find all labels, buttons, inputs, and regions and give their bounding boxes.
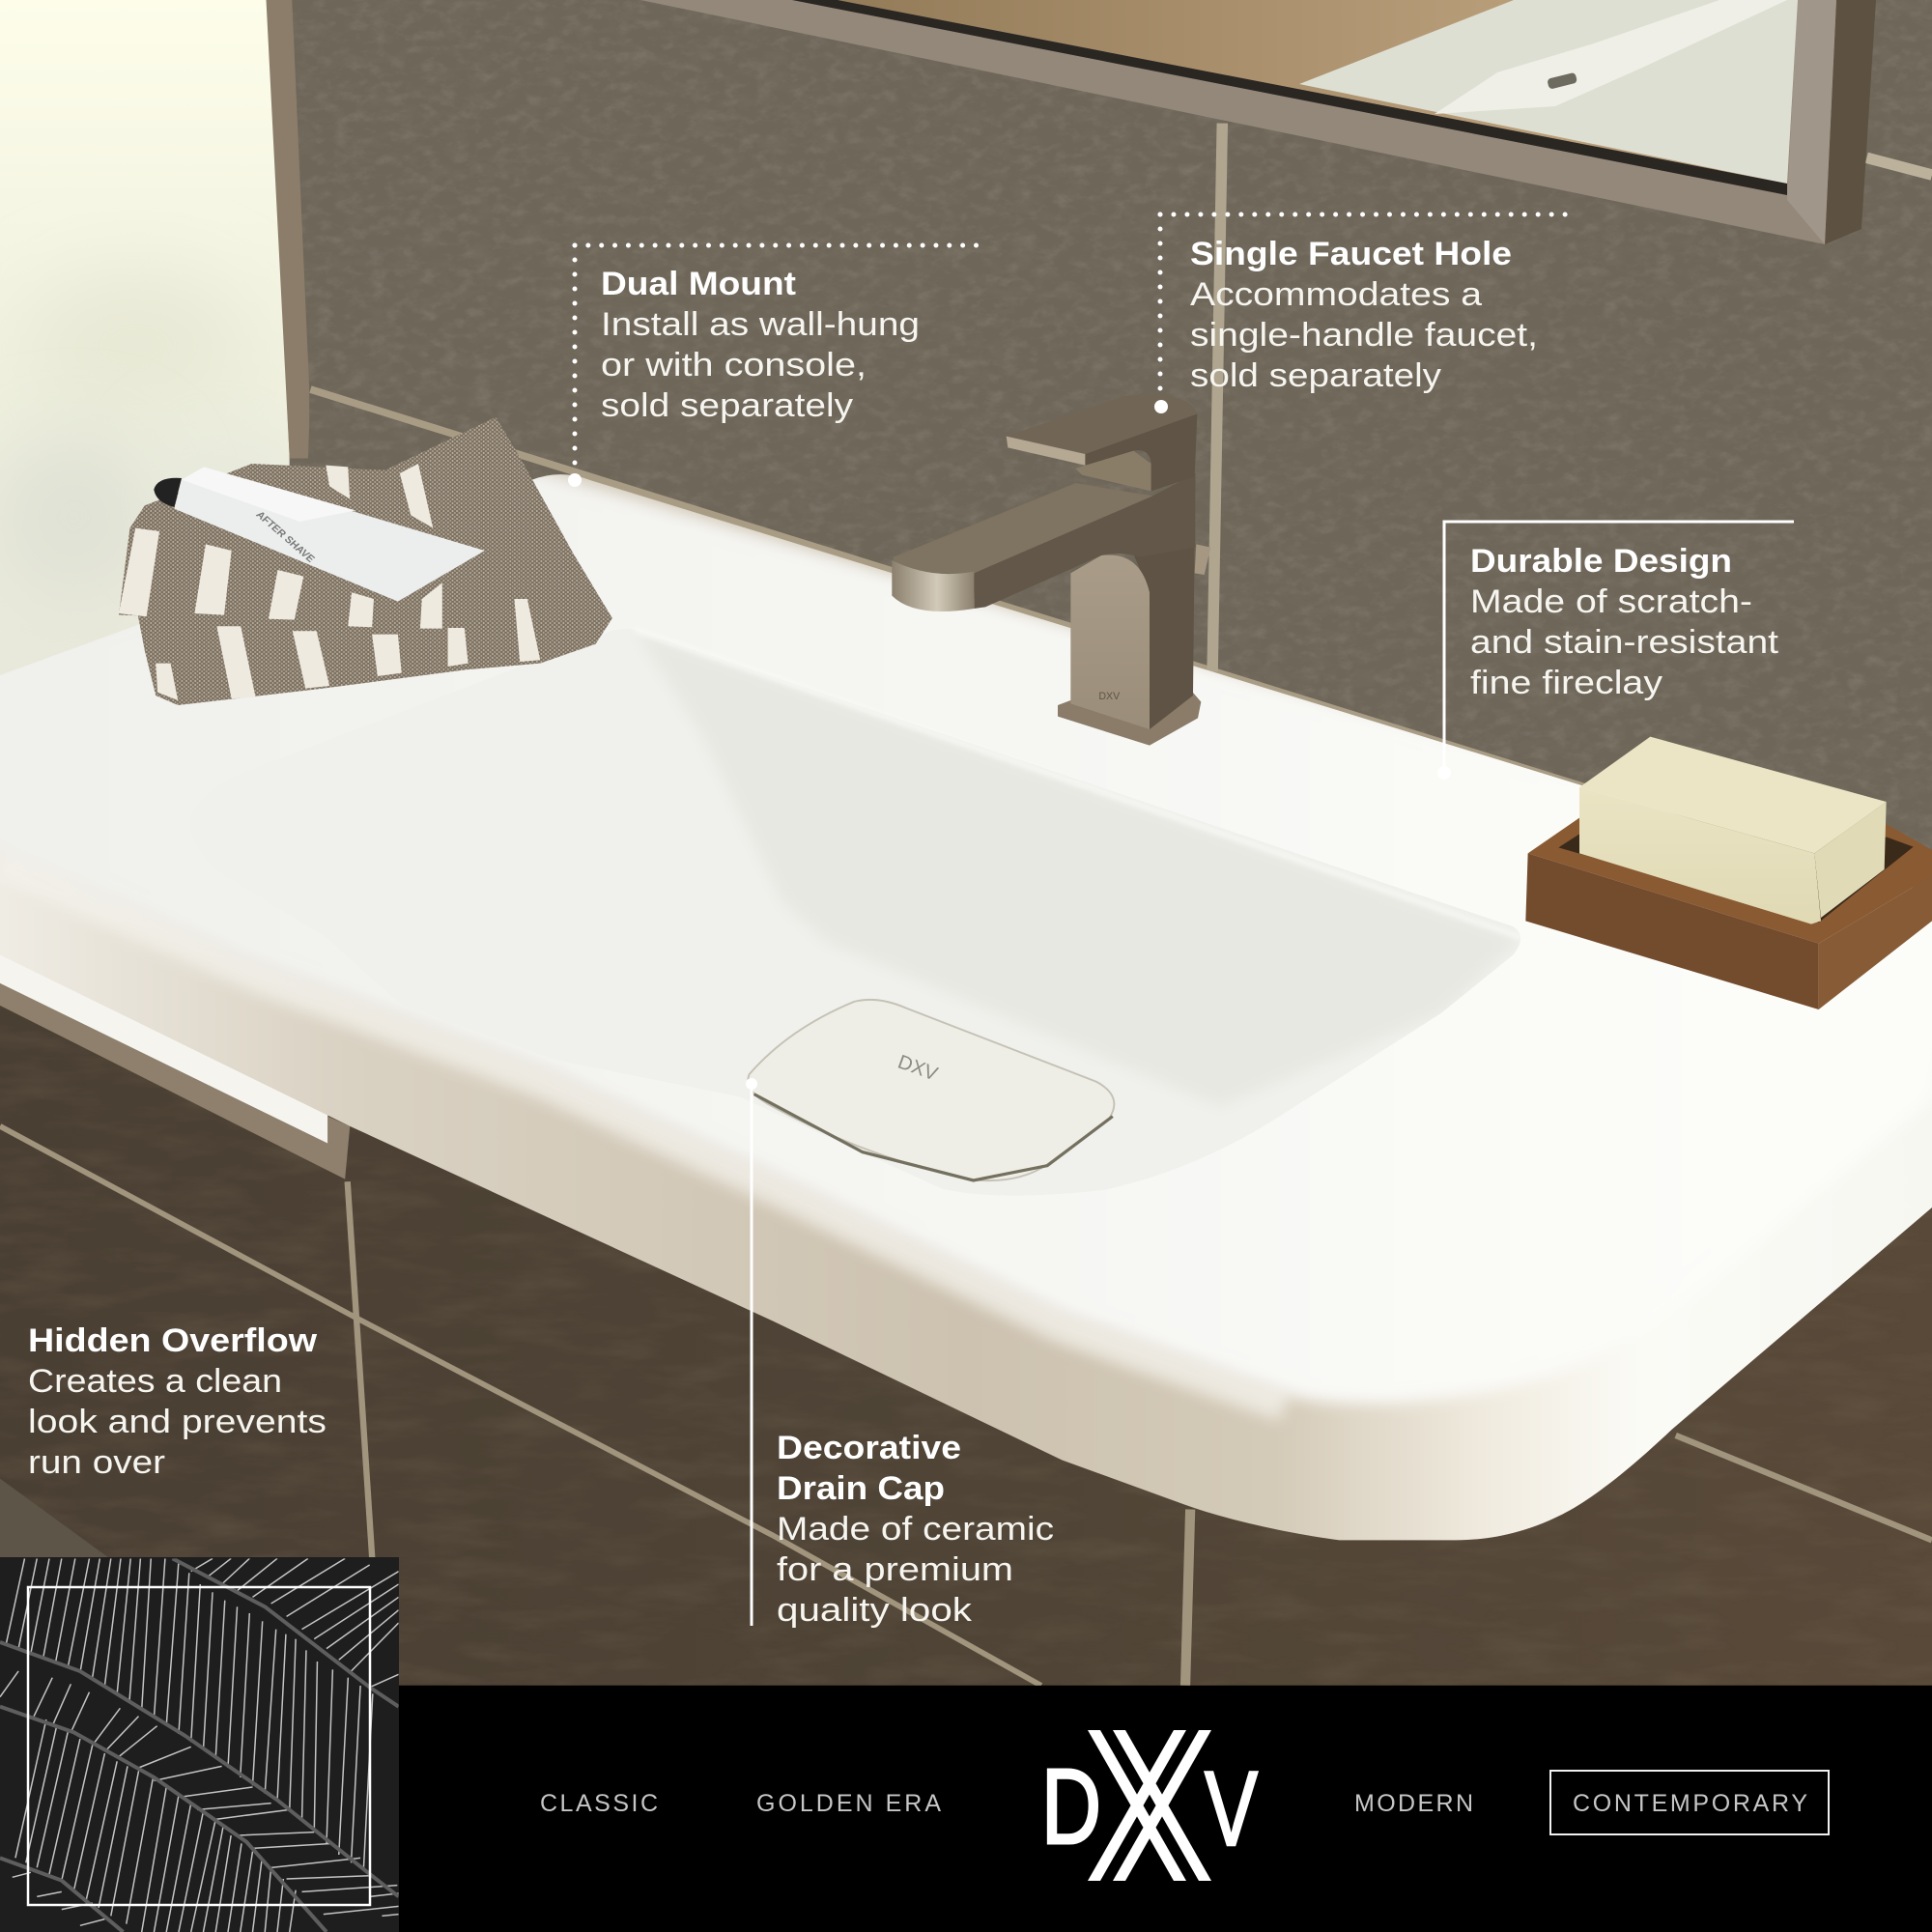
faucet body right side [1133, 473, 1195, 729]
callout: hidden overflow: Hidden Overflow [28, 1322, 318, 1359]
staircase linework [0, 1558, 399, 1932]
mirror frame face [640, 0, 1836, 244]
drain cap text [777, 1430, 1054, 1629]
lower towel fold [137, 611, 540, 705]
solid leader [1437, 522, 1794, 780]
callout: hidden overflow: run over [28, 1444, 165, 1481]
dual mount text: Install as wall-hung [601, 306, 920, 343]
single faucet hole text: sold separately [1190, 357, 1441, 394]
handle side [1085, 413, 1197, 491]
handle top [1007, 395, 1197, 454]
black footer band [398, 1687, 1932, 1932]
single faucet hole text: Single Faucet Hole [1190, 236, 1512, 272]
DXV logo: D [1041, 1747, 1101, 1865]
striped towel with tube [119, 417, 612, 705]
nav: contemporary, selected: CONTEMPORARY [1573, 1790, 1807, 1817]
architecture photo panel [0, 1557, 399, 1932]
footer navigation [540, 1730, 1829, 1881]
DXV logo [1041, 1730, 1258, 1881]
window frame [267, 0, 309, 458]
lower tile wall [0, 936, 1932, 1686]
durable design text: Durable Design [1470, 543, 1732, 580]
callout: single faucet hole [1154, 214, 1567, 413]
durable design text: Made of scratch- [1470, 583, 1752, 620]
callout: hidden overflow [28, 1322, 327, 1481]
upper towel fold [119, 417, 612, 664]
single faucet hole text: Accommodates a [1190, 276, 1482, 313]
soap front [1579, 787, 1821, 924]
towel stripes [119, 464, 540, 700]
dish side [1819, 876, 1932, 1009]
soap in wooden dish [1525, 737, 1932, 1009]
upper stone wall [0, 0, 1932, 985]
faucet base plate [1058, 691, 1201, 746]
single faucet hole text: single-handle faucet, [1190, 317, 1538, 354]
faucet logo: DXV [1098, 691, 1121, 702]
handle neck [1075, 451, 1151, 491]
dual mount text: Dual Mount [601, 266, 796, 302]
single faucet hole text [1190, 236, 1538, 394]
white inner frame [28, 1587, 370, 1905]
mirror frame dark side [1825, 0, 1876, 244]
dotted leader [1154, 214, 1567, 413]
reflected drain [1547, 72, 1577, 90]
callout: hidden overflow: Creates a clean [28, 1363, 282, 1400]
side knob [1195, 544, 1210, 575]
spout end [892, 560, 974, 611]
white fireclay sink [0, 469, 1932, 1540]
reflected tub [1299, 0, 1798, 184]
window with blurred landscape [0, 0, 290, 675]
nav: golden era: GOLDEN ERA [756, 1790, 941, 1817]
drain cap: DXV [895, 1052, 941, 1086]
dish inner [1558, 834, 1914, 923]
drain cap text: Decorative [777, 1430, 961, 1466]
callout: dual mount [568, 245, 978, 487]
solid leader [746, 1078, 757, 1626]
nav: modern: MODERN [1354, 1790, 1473, 1817]
spout underside [974, 473, 1195, 609]
drain cap [748, 1000, 1114, 1180]
white tube [154, 467, 485, 602]
mirror glass [838, 0, 1798, 184]
spout top [894, 483, 1152, 574]
callout: hidden overflow: look and prevents [28, 1404, 327, 1440]
dual mount text [601, 266, 920, 424]
callout: durable design [1437, 522, 1794, 780]
DXV logo: V [1205, 1748, 1258, 1868]
soap top [1579, 737, 1887, 853]
handle front edge [1007, 437, 1085, 466]
dish front [1525, 853, 1819, 1009]
nav: contemporary, selected [1550, 1771, 1829, 1834]
drain cap text: Made of ceramic [777, 1511, 1054, 1548]
drain cap text: quality look [777, 1592, 973, 1629]
durable design text [1470, 543, 1779, 701]
dual mount text: or with console, [601, 347, 867, 384]
mirror shadow line [792, 0, 1787, 195]
callout: decorative drain cap [746, 1078, 1054, 1629]
faucet [892, 395, 1210, 746]
dish rim [1528, 818, 1932, 944]
mirror with reflection [640, 0, 1876, 244]
drain cap text: Drain Cap [777, 1470, 945, 1507]
white tube: AFTER SHAVE [253, 509, 317, 565]
nav: classic: CLASSIC [540, 1790, 658, 1817]
mirror frame right bar [1787, 0, 1836, 244]
soap side [1814, 802, 1887, 918]
tub highlight [1435, 0, 1787, 114]
faucet body front [1070, 554, 1150, 729]
basin [645, 639, 1520, 1173]
durable design text: fine fireclay [1470, 665, 1662, 701]
drain cap text: for a premium [777, 1551, 1013, 1588]
dotted leader [568, 245, 978, 487]
dual mount text: sold separately [601, 387, 853, 424]
durable design text: and stain-resistant [1470, 624, 1779, 661]
wall tile joints [310, 124, 1932, 788]
